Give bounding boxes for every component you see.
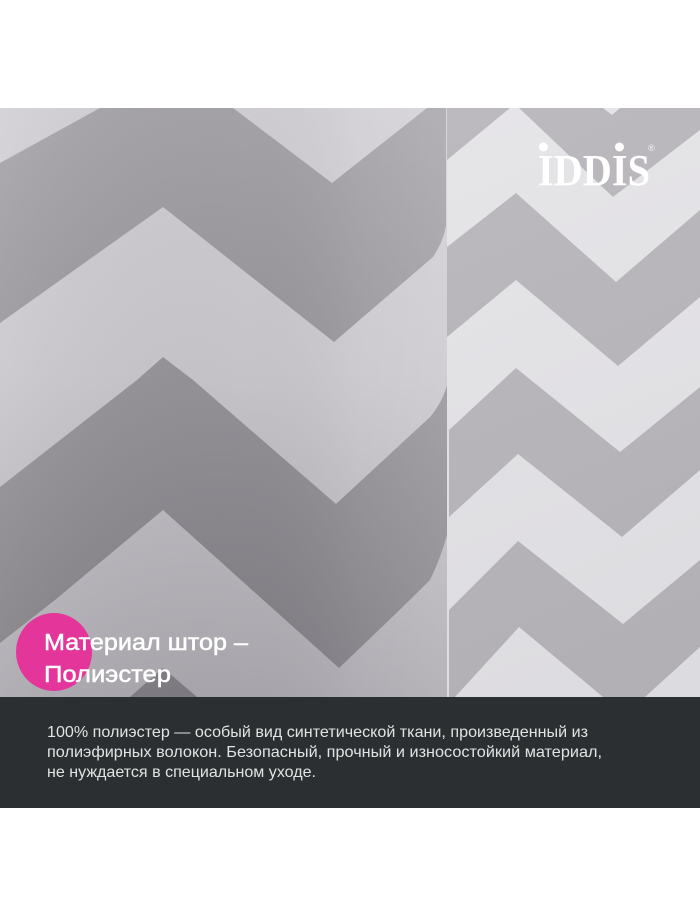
panel: dark description band xyxy=(0,697,700,808)
text block: description: 100% полиэстер — особый вид синтетической ткани, произведенный из xyxy=(47,724,588,741)
text block: description: полиэфирных волокон. Безопасный, прочный и износостойкий материал, xyxy=(47,744,602,761)
heading: Материал штор – xyxy=(44,629,248,655)
heading: Полиэстер xyxy=(44,661,171,687)
icon: IDDIS logo: ® xyxy=(648,143,655,153)
panel: curtain photo left fold xyxy=(0,108,447,697)
chevron bands left fold xyxy=(0,108,447,697)
icon: pink circle accent xyxy=(16,613,92,691)
panel: curtain photo right fold xyxy=(440,108,700,697)
chevron bands right fold xyxy=(447,108,700,697)
text block: description: не нуждается в специальном уходе. xyxy=(47,764,316,781)
icon: IDDIS logo: IDDIS xyxy=(538,146,650,195)
